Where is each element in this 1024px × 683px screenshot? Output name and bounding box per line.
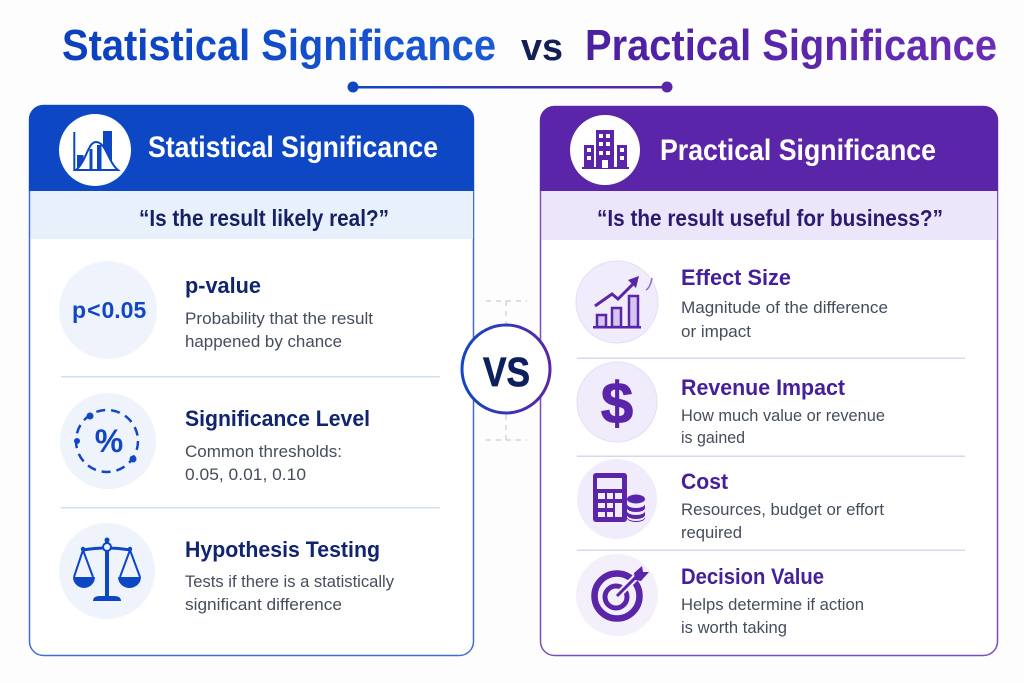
title: vs xyxy=(521,27,563,69)
question band: “Is the result likely real?” xyxy=(139,205,389,231)
title xyxy=(62,21,997,70)
icon: office buildings xyxy=(570,115,640,185)
row: decision value: Decision Value xyxy=(681,564,824,589)
question band: “Is the result useful for business?” xyxy=(597,205,943,231)
icon: dollar sign xyxy=(577,362,657,442)
row: effect size: Magnitude of the difference xyxy=(681,298,888,317)
row: cost: Resources, budget or effort xyxy=(681,500,884,519)
panel heading: Statistical Significance xyxy=(148,131,438,164)
icon: rising bar chart xyxy=(576,261,658,343)
row: revenue impact: How much value or revenue xyxy=(681,406,885,425)
icon: chart with bell curve xyxy=(59,114,131,186)
question band xyxy=(542,191,997,240)
row: cost: required xyxy=(681,523,742,542)
row: significance level: 0.05, 0.01, 0.10 xyxy=(185,465,306,484)
row: hypothesis testing: Tests if there is a statistically xyxy=(185,572,394,591)
title: Statistical Significance xyxy=(62,21,496,70)
icon: percent in dashed ring: % xyxy=(95,423,123,459)
row: revenue impact: Revenue Impact xyxy=(681,375,845,400)
row: p-value xyxy=(59,261,373,359)
panel: practical significance xyxy=(540,106,998,656)
row: revenue impact: is gained xyxy=(681,428,745,447)
row: revenue impact xyxy=(577,362,885,447)
row: decision value: Helps determine if action xyxy=(681,595,864,614)
row: effect size: Effect Size xyxy=(681,265,791,290)
row: p-value: p-value xyxy=(185,273,261,298)
icon: calculator and coins xyxy=(577,459,657,539)
row: significance level: Common thresholds: xyxy=(185,442,342,461)
row: decision value: is worth taking xyxy=(681,618,787,637)
row: effect size xyxy=(576,261,888,343)
row: hypothesis testing: significant difference xyxy=(185,595,342,614)
row: significance level xyxy=(60,393,370,489)
panel header xyxy=(29,105,474,191)
icon: target with arrow xyxy=(576,554,658,636)
panel header xyxy=(540,106,998,191)
title connector xyxy=(348,82,672,92)
icon: percent in dashed ring xyxy=(60,393,156,489)
row: cost xyxy=(577,459,884,542)
row: cost: Cost xyxy=(681,469,728,494)
question band xyxy=(30,191,473,239)
row: significance level: Significance Level xyxy=(185,406,370,431)
panel: statistical significance xyxy=(29,105,474,656)
panel heading: Practical Significance xyxy=(660,134,936,167)
row: decision value xyxy=(576,554,864,637)
icon: balance scale xyxy=(59,523,155,619)
icon: p value: p<0.05 xyxy=(72,297,146,323)
icon: p value xyxy=(59,261,157,359)
row: effect size: or impact xyxy=(681,322,751,341)
vs badge: VS xyxy=(483,349,530,395)
row: hypothesis testing xyxy=(59,523,394,619)
icon: dollar sign: $ xyxy=(601,371,633,436)
row: p-value: happened by chance xyxy=(185,332,342,351)
row: hypothesis testing: Hypothesis Testing xyxy=(185,537,380,562)
vs badge xyxy=(462,301,550,440)
row: p-value: Probability that the result xyxy=(185,309,373,328)
